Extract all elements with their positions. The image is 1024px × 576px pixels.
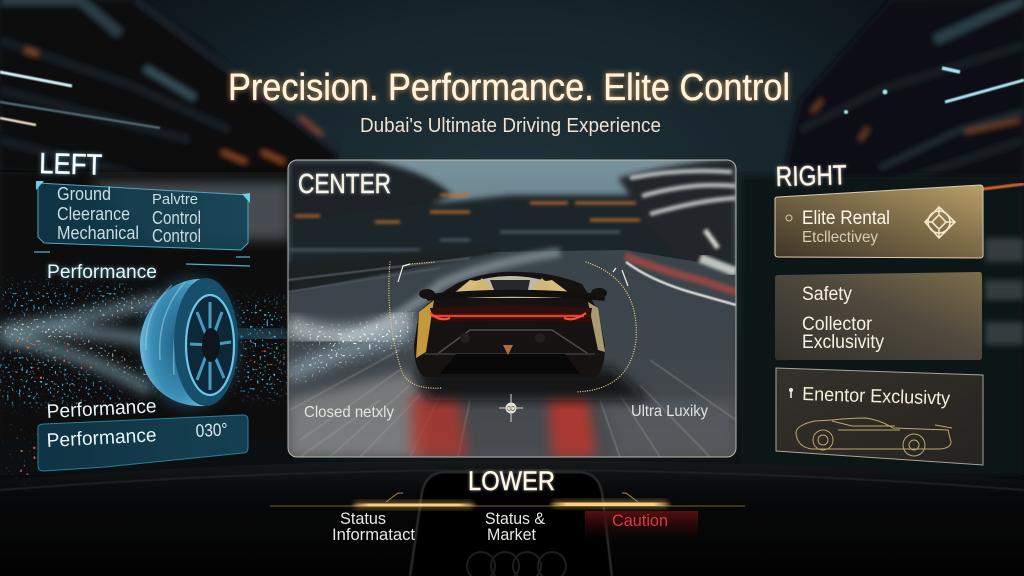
sky and buildings bbox=[288, 160, 736, 270]
card: safety and collector: Collector bbox=[802, 313, 872, 335]
gold divider bbox=[270, 493, 745, 509]
card: elite rental: Etcllectivey bbox=[802, 229, 878, 246]
panel: left column bbox=[0, 148, 288, 476]
card: safety and collector bbox=[775, 272, 982, 360]
status: caution: Caution bbox=[612, 512, 668, 530]
ground clearance labels: Mechanical bbox=[57, 223, 139, 243]
status: information bbox=[332, 510, 415, 544]
status: market: Status & bbox=[485, 510, 545, 528]
panel: performance readout bbox=[38, 415, 248, 471]
label: performance upper: Performance bbox=[46, 395, 157, 423]
status: information: Status bbox=[340, 510, 386, 528]
status: market bbox=[485, 510, 545, 544]
card: enentor exclusivity bbox=[776, 368, 983, 465]
heading: right: RIGHT bbox=[775, 159, 847, 192]
label: performance lower: Performance bbox=[46, 424, 157, 452]
title: Precision. Performance. Elite Control bbox=[228, 67, 790, 109]
card: safety and collector: Safety bbox=[802, 283, 852, 305]
card: elite rental bbox=[775, 185, 983, 258]
road icon: crosshair: 00 bbox=[507, 406, 515, 413]
ground clearance labels: Ground bbox=[57, 184, 111, 204]
icon: glowing tire bbox=[140, 277, 240, 409]
label: performance: Performance bbox=[47, 261, 157, 283]
panel: lower status bar bbox=[270, 466, 745, 544]
red tail light reflections bbox=[410, 396, 468, 457]
status: information: Informatact bbox=[332, 526, 415, 544]
panel: right column bbox=[775, 159, 983, 465]
road icon: crosshair bbox=[499, 394, 523, 422]
card: enentor exclusivity: Enentor Exclusivty bbox=[802, 384, 951, 410]
label: closed netxly: Closed netxly bbox=[304, 404, 394, 421]
supercar rear view bbox=[414, 272, 607, 377]
ground clearance labels: Control bbox=[152, 226, 201, 246]
ground clearance labels: Palvtre bbox=[152, 191, 198, 208]
heading: lower: LOWER bbox=[468, 466, 555, 496]
ground clearance labels bbox=[57, 184, 201, 246]
card: elite rental: Elite Rental bbox=[802, 208, 890, 229]
right futuristic structure bbox=[780, 0, 1024, 195]
road bbox=[288, 250, 736, 457]
status: caution bbox=[585, 511, 698, 541]
readout value: 030° bbox=[195, 419, 228, 441]
particle stream bbox=[0, 285, 288, 476]
status: market: Market bbox=[487, 526, 536, 544]
curb right bbox=[625, 256, 736, 292]
panel: ground clearance bbox=[34, 181, 250, 266]
airflow wake bbox=[288, 252, 636, 392]
label: ultra luxiky: Ultra Luxiky bbox=[631, 403, 708, 420]
heading: center: CENTER bbox=[298, 168, 391, 199]
subtitle: Dubai's Ultimate Driving Experience bbox=[360, 115, 661, 137]
left futuristic structure bbox=[0, 0, 338, 195]
icon: ornament diamond bbox=[925, 207, 955, 238]
panel: center bbox=[288, 158, 736, 457]
ground clearance labels: Control bbox=[152, 208, 201, 228]
car shadow bbox=[412, 368, 650, 400]
dashboard bbox=[0, 460, 1024, 576]
heading: left: LEFT bbox=[39, 148, 103, 182]
ground clearance labels: Cleerance bbox=[57, 204, 130, 224]
side dark backgrounds bbox=[0, 172, 290, 472]
card: safety and collector: Exclusivity bbox=[802, 331, 884, 353]
icon: car wireframe bbox=[796, 418, 952, 456]
motion streaks bbox=[288, 370, 425, 457]
